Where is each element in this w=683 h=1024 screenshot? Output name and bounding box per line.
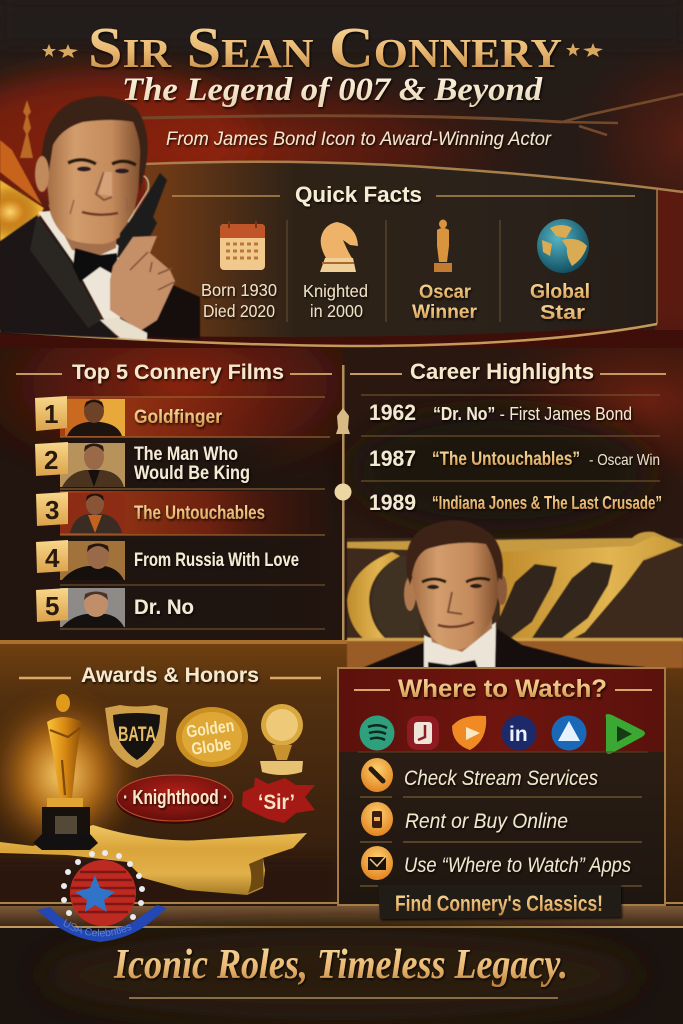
films heading: Top 5 Connery Films xyxy=(72,361,284,384)
zero xyxy=(347,552,400,642)
film 3 row: The Untouchables xyxy=(134,503,265,524)
section background: awards xyxy=(0,640,683,910)
quick facts heading: Quick Facts xyxy=(295,182,422,207)
row: where to watch apps: Use “Where to Watch” Apps xyxy=(404,854,631,877)
icon: play orange xyxy=(452,716,486,750)
icon: green play xyxy=(606,714,645,754)
footer rule xyxy=(129,997,558,999)
panel: top 5 films list xyxy=(35,396,330,629)
separators xyxy=(358,751,648,753)
brows and eyes xyxy=(422,578,490,582)
title stars left xyxy=(42,44,78,58)
fact: global star: Star xyxy=(540,302,585,324)
film 5 row: 5 xyxy=(45,591,59,621)
portrait: Bond with pistol xyxy=(0,96,200,340)
subtitle: The Legend of 007 & Beyond xyxy=(122,72,543,108)
film 1 row: 1 xyxy=(44,399,58,429)
fact: oscar winner xyxy=(412,281,477,323)
007 emblem backdrop xyxy=(347,532,683,668)
highlight 1962 xyxy=(369,400,632,425)
fact: oscar winner: Winner xyxy=(412,301,477,323)
title stars right xyxy=(566,43,603,57)
badge: BATA shield: BATA xyxy=(118,723,156,746)
jacket left with lapel xyxy=(0,215,118,338)
golden burst xyxy=(0,140,42,205)
button: find Connery's classics xyxy=(378,885,621,919)
film 2 row: The Man Who xyxy=(134,444,238,465)
film 4 row xyxy=(36,538,330,585)
film 2 row: Would Be King xyxy=(134,463,250,484)
seven counter two xyxy=(532,562,613,638)
row: where to watch apps xyxy=(361,846,631,880)
film 3 row xyxy=(36,489,330,535)
hair xyxy=(406,520,503,585)
highlight 1989: 1989 xyxy=(369,490,416,515)
icon: oscar statuette xyxy=(434,220,452,272)
film 1 row: Goldfinger xyxy=(134,407,223,428)
footer background band xyxy=(0,902,683,1024)
quick facts panel xyxy=(0,161,683,346)
ornament xyxy=(20,100,33,158)
icon: calendar xyxy=(220,221,265,270)
tagline: From James Bond Icon to Award-Winning Actor xyxy=(166,129,552,150)
film 4 row: From Russia With Love xyxy=(134,550,299,571)
film 4 row: 4 xyxy=(45,543,60,573)
fact: dates: Born 1930 xyxy=(201,280,277,300)
film 2 row: 2 xyxy=(44,445,58,475)
seven counter one xyxy=(495,564,557,637)
badge: golden globe xyxy=(176,707,248,767)
ear xyxy=(35,156,49,192)
highlight 1987: 1987 xyxy=(369,446,416,471)
hair xyxy=(42,96,148,192)
film 5 row: Dr. No xyxy=(134,596,194,619)
icon: oscar statue xyxy=(33,694,98,850)
lower strip xyxy=(347,638,683,641)
badge: Sir seal: ‘Sir’ xyxy=(258,791,295,814)
nose and mouth xyxy=(448,592,462,614)
face xyxy=(47,120,140,244)
hand xyxy=(110,236,175,331)
row: check stream services xyxy=(361,758,598,792)
row: check stream services: Check Stream Services xyxy=(404,767,598,790)
ears xyxy=(404,577,416,611)
bow tie xyxy=(73,248,118,282)
awards heading: Awards & Honors xyxy=(81,663,259,687)
button: find Connery's classics: Find Connery's Classics! xyxy=(395,891,603,916)
fact: knighted xyxy=(303,281,368,321)
decorative arrow line xyxy=(140,94,683,135)
title: Sir Sean Connery xyxy=(88,15,562,80)
bow tie xyxy=(428,660,478,668)
badge: golden globe: Golden xyxy=(185,716,235,741)
suit xyxy=(362,628,645,669)
fact: global star: Global xyxy=(530,281,590,303)
timeline divider xyxy=(334,365,352,640)
shirt xyxy=(38,210,150,336)
film 5 row xyxy=(36,586,330,629)
face xyxy=(412,543,498,650)
career heading: Career Highlights xyxy=(410,359,594,384)
highlight 1962: “Dr. No” - First James Bond xyxy=(433,404,632,424)
badge: knighthood: · Knighthood · xyxy=(123,787,228,809)
icon: linkedin: in xyxy=(509,723,528,746)
row: rent or buy xyxy=(361,802,568,836)
fact: global star xyxy=(530,281,590,324)
footer slogan: Iconic Roles, Timeless Legacy. xyxy=(113,942,568,988)
jacket right xyxy=(120,285,200,339)
highlight 1987 xyxy=(369,446,660,471)
neck xyxy=(48,205,118,256)
highlight 1987: “The Untouchables” xyxy=(432,449,580,470)
badge: BATA shield xyxy=(105,705,168,768)
brows and eyes xyxy=(68,160,136,165)
logo: USA Celebrities: USA Celebrities xyxy=(64,919,132,936)
icon: spotify xyxy=(360,716,394,750)
panel: where to watch xyxy=(338,668,665,905)
icon: music app xyxy=(407,716,439,750)
shirt xyxy=(424,622,496,668)
portrait: smiling Connery xyxy=(362,520,645,669)
film 3 row: 3 xyxy=(45,495,59,525)
icon: blue app xyxy=(552,716,586,750)
icon: linkedin xyxy=(502,716,536,750)
where to watch heading: Where to Watch? xyxy=(398,675,607,703)
film 2 row xyxy=(35,438,330,488)
logo: USA Celebrities xyxy=(37,850,167,942)
icon: chess knight xyxy=(320,222,358,272)
nose and mouth xyxy=(96,172,112,200)
neck xyxy=(425,612,492,652)
cuff xyxy=(100,317,147,340)
fact: dates: Died 2020 xyxy=(203,301,275,321)
row: rent or buy: Rent or Buy Online xyxy=(405,810,568,833)
career highlights list xyxy=(361,395,662,515)
fact: knighted: in 2000 xyxy=(310,301,363,321)
fact: oscar winner: Oscar xyxy=(419,281,471,303)
highlight 1962: 1962 xyxy=(369,400,416,425)
gold ribbon xyxy=(0,825,307,895)
pistol xyxy=(117,173,167,258)
section background: films and career xyxy=(0,275,683,642)
highlight 1989 xyxy=(369,490,662,515)
badge: trophy xyxy=(260,704,303,775)
badge: knighthood xyxy=(116,775,234,824)
icon: globe xyxy=(537,219,589,273)
badge: Sir seal xyxy=(242,777,315,823)
highlight 1987: - Oscar Win xyxy=(589,452,660,469)
badge: golden globe: Globe xyxy=(190,734,232,759)
fact: dates xyxy=(201,280,277,321)
double seven body xyxy=(500,536,683,640)
top band and swoosh xyxy=(347,532,683,560)
fact: knighted: Knighted xyxy=(303,281,368,301)
dividers xyxy=(287,220,500,322)
film 1 row xyxy=(35,396,330,437)
